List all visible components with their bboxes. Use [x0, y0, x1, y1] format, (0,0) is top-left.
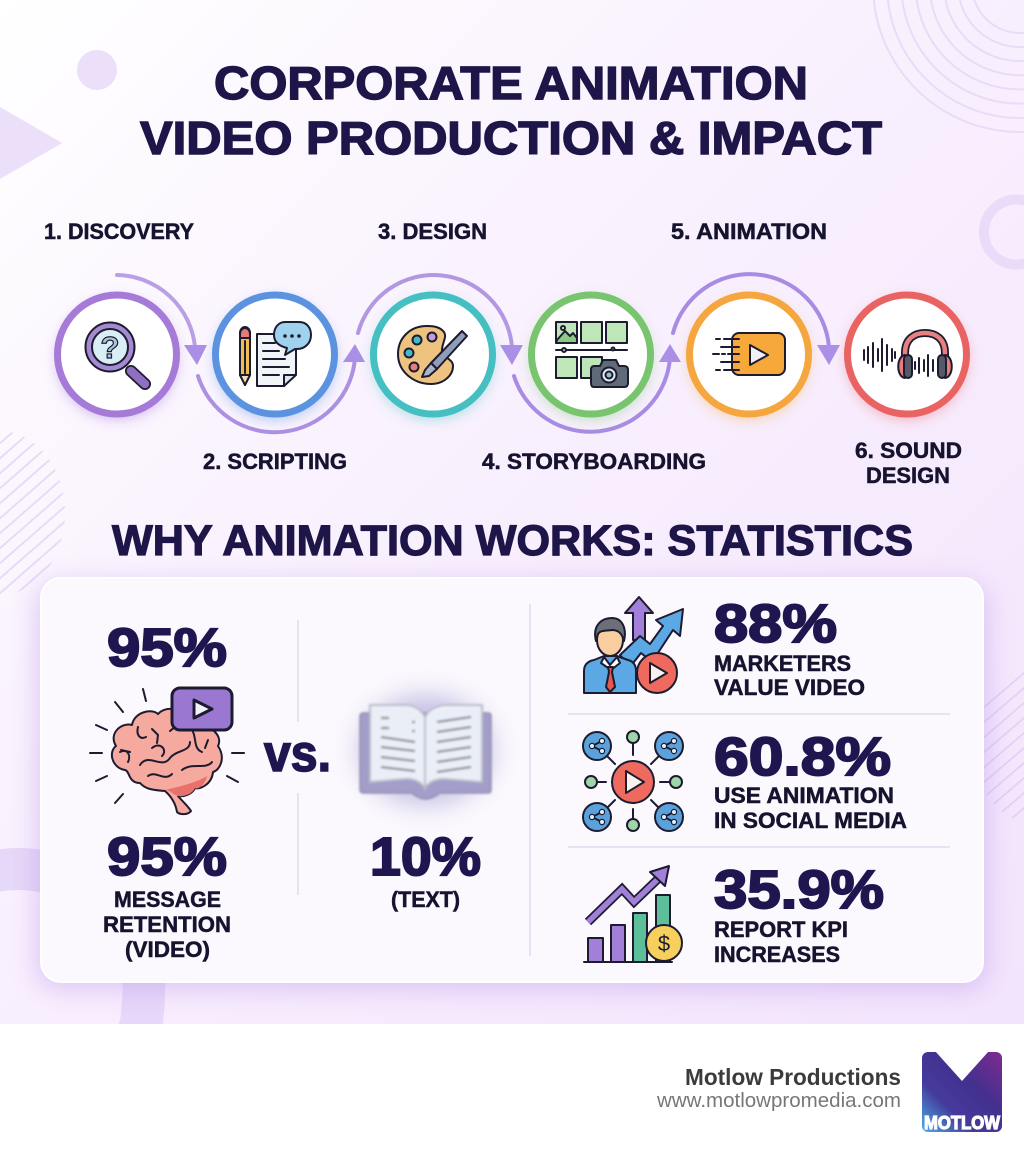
footer: website: www.motlowpromedia.com [656, 1090, 901, 1112]
stat: video headline 95%: 95% [107, 618, 227, 678]
panel: statistics [36, 578, 988, 990]
stat: 95% video retention: 95% [107, 827, 227, 887]
step labels: 6. SOUND [855, 438, 962, 463]
stat: 35.9% KPI increases: INCREASES [714, 942, 840, 967]
step 3 circle: design [373, 295, 493, 419]
stat: 60.8% social media [714, 727, 907, 833]
title: CORPORATE ANIMATION [214, 57, 808, 109]
stat: 35.9% KPI increases: REPORT KPI [714, 917, 848, 942]
step 4 circle: storyboarding [531, 295, 651, 419]
vs label: vs. [264, 725, 331, 783]
icon: video player with speed lines [713, 333, 785, 375]
step 2 circle: scripting [215, 295, 335, 419]
process arrows [117, 274, 840, 432]
step 5 circle: animation [689, 295, 809, 419]
step labels: 1. DISCOVERY [44, 219, 194, 244]
logo: Motlow: MOTLOW [924, 1113, 1000, 1133]
step 1 circle: discovery [57, 295, 177, 419]
icon: waveform and headphones [864, 333, 952, 378]
title: VIDEO PRODUCTION & IMPACT [140, 112, 882, 164]
stat: 95% video retention: RETENTION [103, 912, 231, 937]
section heading: WHY ANIMATION WORKS: STATISTICS [112, 517, 913, 565]
step 6 circle: sound design [847, 295, 967, 419]
icon: brain with video badge [90, 688, 244, 814]
icon: pencil and script [240, 322, 311, 386]
icon: faded open book [360, 696, 492, 804]
icon: magnifying glass: ? [101, 330, 119, 365]
step labels: DESIGN [866, 463, 950, 488]
step labels [44, 219, 962, 488]
stat: 10% text retention: 10% [370, 827, 481, 887]
icon: bar chart with coin and arrow: $ [658, 931, 670, 956]
step labels: 2. SCRIPTING [203, 449, 347, 474]
stat: 35.9% KPI increases: 35.9% [714, 860, 884, 920]
icon: bar chart with coin and arrow [584, 866, 682, 962]
stat: 95% video retention: MESSAGE [114, 887, 221, 912]
stat: 88% marketers: MARKETERS [714, 651, 851, 676]
stat: 88% marketers [714, 594, 865, 700]
icon: paint palette and brush [398, 326, 467, 384]
stat: 60.8% social media: USE ANIMATION [714, 783, 894, 808]
stat: 88% marketers: 88% [714, 594, 837, 654]
footer: company name: Motlow Productions [685, 1064, 901, 1090]
stat: 10% text retention: (TEXT) [391, 887, 460, 912]
step labels: 4. STORYBOARDING [482, 449, 706, 474]
stat: 60.8% social media: 60.8% [714, 727, 891, 787]
step labels: 3. DESIGN [378, 219, 487, 244]
icon: social network with play button [583, 731, 683, 831]
stat: 95% video retention: (VIDEO) [125, 937, 210, 962]
title [140, 57, 882, 164]
icon: marketer with growth arrows [584, 597, 683, 693]
stat: 88% marketers: VALUE VIDEO [714, 675, 865, 700]
step labels: 5. ANIMATION [671, 219, 827, 244]
logo: Motlow [922, 1051, 1002, 1133]
stat: 35.9% KPI increases [714, 860, 884, 967]
stat: 60.8% social media: IN SOCIAL MEDIA [714, 808, 907, 833]
stat: 10% text retention [370, 827, 481, 912]
stat: 95% video retention [103, 827, 231, 962]
icon: storyboard frames and camera [556, 322, 628, 387]
